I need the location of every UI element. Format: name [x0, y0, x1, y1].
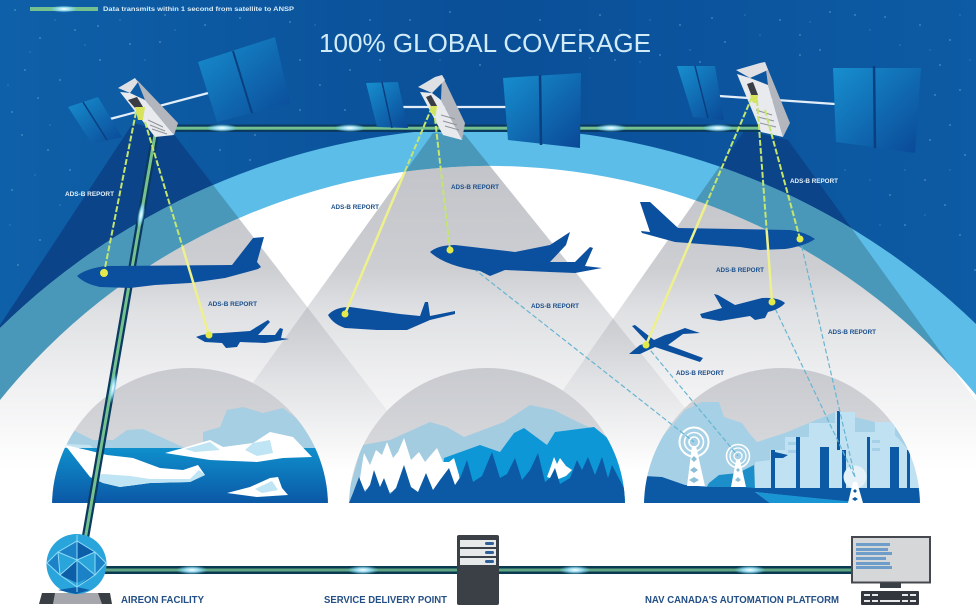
cones of coverage over atmosphere: [0, 133, 952, 400]
ADS-B report labels: ADS-B REPORT: [331, 205, 379, 211]
icon: automation platform computer: [852, 537, 930, 605]
ADS-B report labels: ADS-B REPORT: [531, 304, 579, 310]
dome: mountain forest scene: [349, 368, 625, 503]
plane 4: [430, 232, 602, 276]
white snowy trees: [360, 438, 460, 492]
cones of coverage over surface: [0, 166, 976, 446]
middle iceberg: [165, 432, 312, 462]
icon: service delivery point server: [457, 535, 499, 605]
ADS-B report labels: ADS-B REPORT: [790, 179, 838, 185]
ADS-B report labels: ADS-B REPORT: [65, 192, 114, 198]
ADS-B report labels: [65, 179, 876, 377]
dome: arctic ice scene: [52, 368, 328, 503]
data link: satellite to Aireon facility: [85, 135, 155, 540]
legend: [30, 6, 294, 13]
icon: Aireon facility geodesic sphere: [39, 534, 112, 604]
title: 100% GLOBAL COVERAGE: [319, 28, 651, 58]
cones of coverage over sky: [0, 123, 976, 470]
plane 7: business jet: [629, 325, 703, 362]
ADS-B report labels: ADS-B REPORT: [828, 330, 876, 336]
plane 2: [196, 320, 289, 348]
plane 3: [328, 302, 455, 330]
ADS-B report labels: ADS-B REPORT: [716, 268, 764, 274]
label: NAV Canada's automation platform: NAV CANADA'S AUTOMATION PLATFORM: [645, 594, 839, 606]
earth: atmosphere band: [0, 128, 976, 609]
ADS-B report labels: ADS-B REPORT: [208, 302, 257, 308]
radio tower 2: [726, 444, 750, 487]
ADS-B report labels: ADS-B REPORT: [676, 371, 724, 377]
ADS-B antenna dots: [100, 236, 804, 348]
satellite 2: [366, 73, 581, 148]
dark evergreen trees: [349, 452, 625, 503]
label: Aireon facility: AIREON FACILITY: [121, 594, 204, 606]
ADS-B report labels: ADS-B REPORT: [451, 185, 499, 191]
radio tower 3: [844, 466, 866, 503]
earth: white surface: [0, 166, 976, 609]
dome: city and radio towers scene: [644, 368, 920, 503]
signal paths to ground stations: [450, 239, 855, 477]
ADS-B signal beams: [104, 97, 800, 345]
plane 5: [640, 202, 815, 250]
plane 1: [77, 237, 264, 288]
big iceberg: [65, 445, 205, 487]
satellite 1: [68, 37, 290, 144]
plane 6: [700, 294, 785, 321]
small iceberg: [227, 477, 288, 497]
data link: satellite to satellite: [175, 124, 760, 132]
radio tower 1: [680, 428, 708, 486]
legend: Data transmits within 1 second from satellite to ANSP: [103, 7, 294, 13]
data link: ground network: [100, 566, 855, 574]
satellite 3: [677, 62, 921, 153]
label: service delivery point: SERVICE DELIVERY POINT: [324, 594, 448, 606]
ground and hills: [644, 465, 920, 503]
